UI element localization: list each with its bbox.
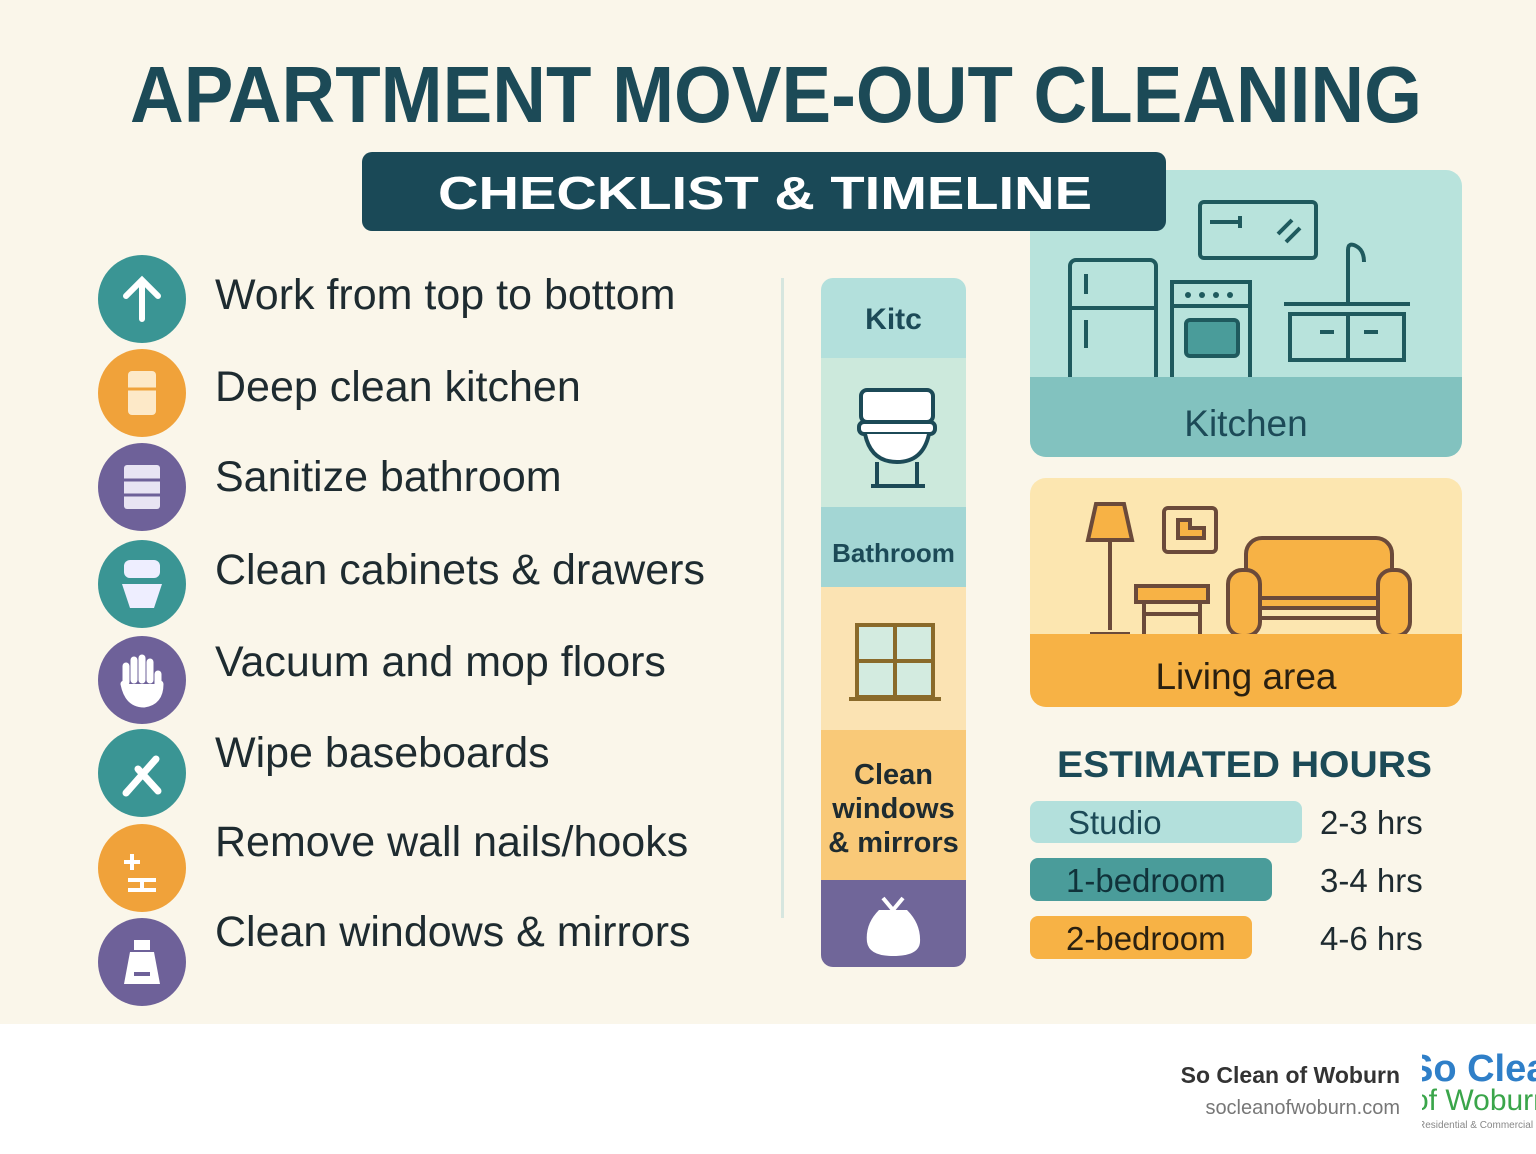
- timeline column: Bathroom: [832, 538, 955, 568]
- hours chart: Studio: [1068, 804, 1162, 841]
- icon: toilet: [821, 358, 966, 507]
- item: kitchen: [98, 349, 581, 437]
- footer brand: [1181, 1062, 1400, 1119]
- timeline column: & mirrors: [828, 827, 959, 859]
- hours chart: 3-4 hrs: [1320, 862, 1423, 899]
- item: kitchen: Deep clean kitchen: [215, 363, 581, 411]
- item: baseboards: Wipe baseboards: [215, 729, 550, 777]
- icon: trash bag: [821, 880, 966, 967]
- item: floors: Vacuum and mop floors: [215, 638, 666, 686]
- hours chart: 2-3 hrs: [1320, 804, 1423, 841]
- title: APARTMENT MOVE-OUT CLEANING: [130, 50, 1422, 139]
- checklist: [98, 255, 705, 1006]
- timeline column: Clean: [854, 759, 933, 791]
- item: nails: [98, 818, 688, 912]
- footer brand: So Clean of Woburn: [1181, 1062, 1400, 1088]
- timeline column: [821, 278, 966, 967]
- card: kitchen: [1030, 170, 1462, 457]
- item: windows: Clean windows & mirrors: [215, 908, 691, 956]
- timeline column: windows: [832, 793, 955, 825]
- item: baseboards: [98, 729, 550, 817]
- card: living area: [1030, 478, 1462, 707]
- item: cabinets: Clean cabinets & drawers: [215, 546, 705, 594]
- item: floors: [98, 636, 666, 724]
- hours chart: 1-bedroom: [1066, 862, 1226, 899]
- item: nails: Remove wall nails/hooks: [215, 818, 688, 866]
- item: bathroom: [98, 443, 562, 531]
- card: kitchen: Kitchen: [1184, 403, 1308, 444]
- item: bathroom: Sanitize bathroom: [215, 453, 562, 501]
- footer brand: socleanofwoburn.com: [1205, 1097, 1400, 1119]
- subtitle banner: CHECKLIST & TIMELINE: [438, 167, 1092, 219]
- hours chart: 2-bedroom: [1066, 920, 1226, 957]
- icon: window: [821, 587, 966, 730]
- card: living area: Living area: [1155, 656, 1336, 697]
- item: top to bottom: Work from top to bottom: [215, 271, 675, 319]
- hours chart: 4-6 hrs: [1320, 920, 1423, 957]
- timeline column: Kitc: [865, 303, 922, 336]
- item: windows: [98, 908, 691, 1006]
- logo: [1422, 1048, 1536, 1131]
- item: top to bottom: [98, 255, 675, 343]
- item: cabinets: [98, 540, 705, 628]
- heading: estimated hours: ESTIMATED HOURS: [1057, 744, 1432, 785]
- hours chart: [1030, 801, 1423, 959]
- subtitle banner: [362, 152, 1166, 231]
